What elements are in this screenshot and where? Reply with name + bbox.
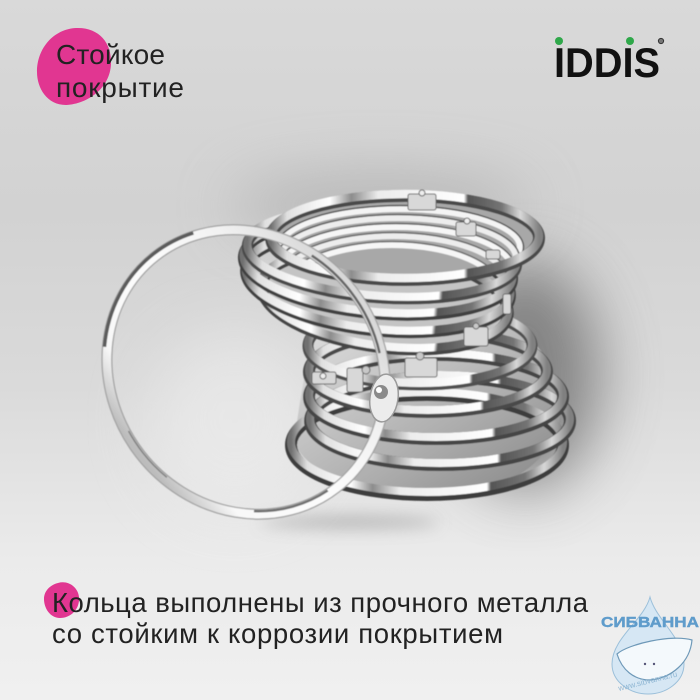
watermark logo: Сибванна: www.sibvanna.ru <box>616 670 678 693</box>
upper ring group <box>240 201 520 363</box>
watermark logo: Сибванна <box>601 597 700 694</box>
heading: Стойкое <box>56 39 165 70</box>
heading blob <box>37 28 111 105</box>
stacked metal rings <box>240 190 570 495</box>
heading: покрытие <box>56 72 184 103</box>
watermark logo: Сибванна: СИБВАННА <box>601 615 700 631</box>
top ring <box>271 194 539 280</box>
lower ring group <box>291 305 570 495</box>
caption: Кольца выполнены из прочного металла <box>52 587 589 618</box>
soft floor shadows <box>150 175 600 528</box>
logo: IDDIS: IDDIS <box>554 39 660 86</box>
open ring clasp <box>367 372 401 424</box>
caption: со стойким к коррозии покрытием <box>52 618 503 649</box>
open single ring <box>46 169 446 575</box>
caption blob <box>44 582 79 618</box>
ring clasps <box>312 190 511 392</box>
stripes seen inside the top ring <box>279 202 533 274</box>
